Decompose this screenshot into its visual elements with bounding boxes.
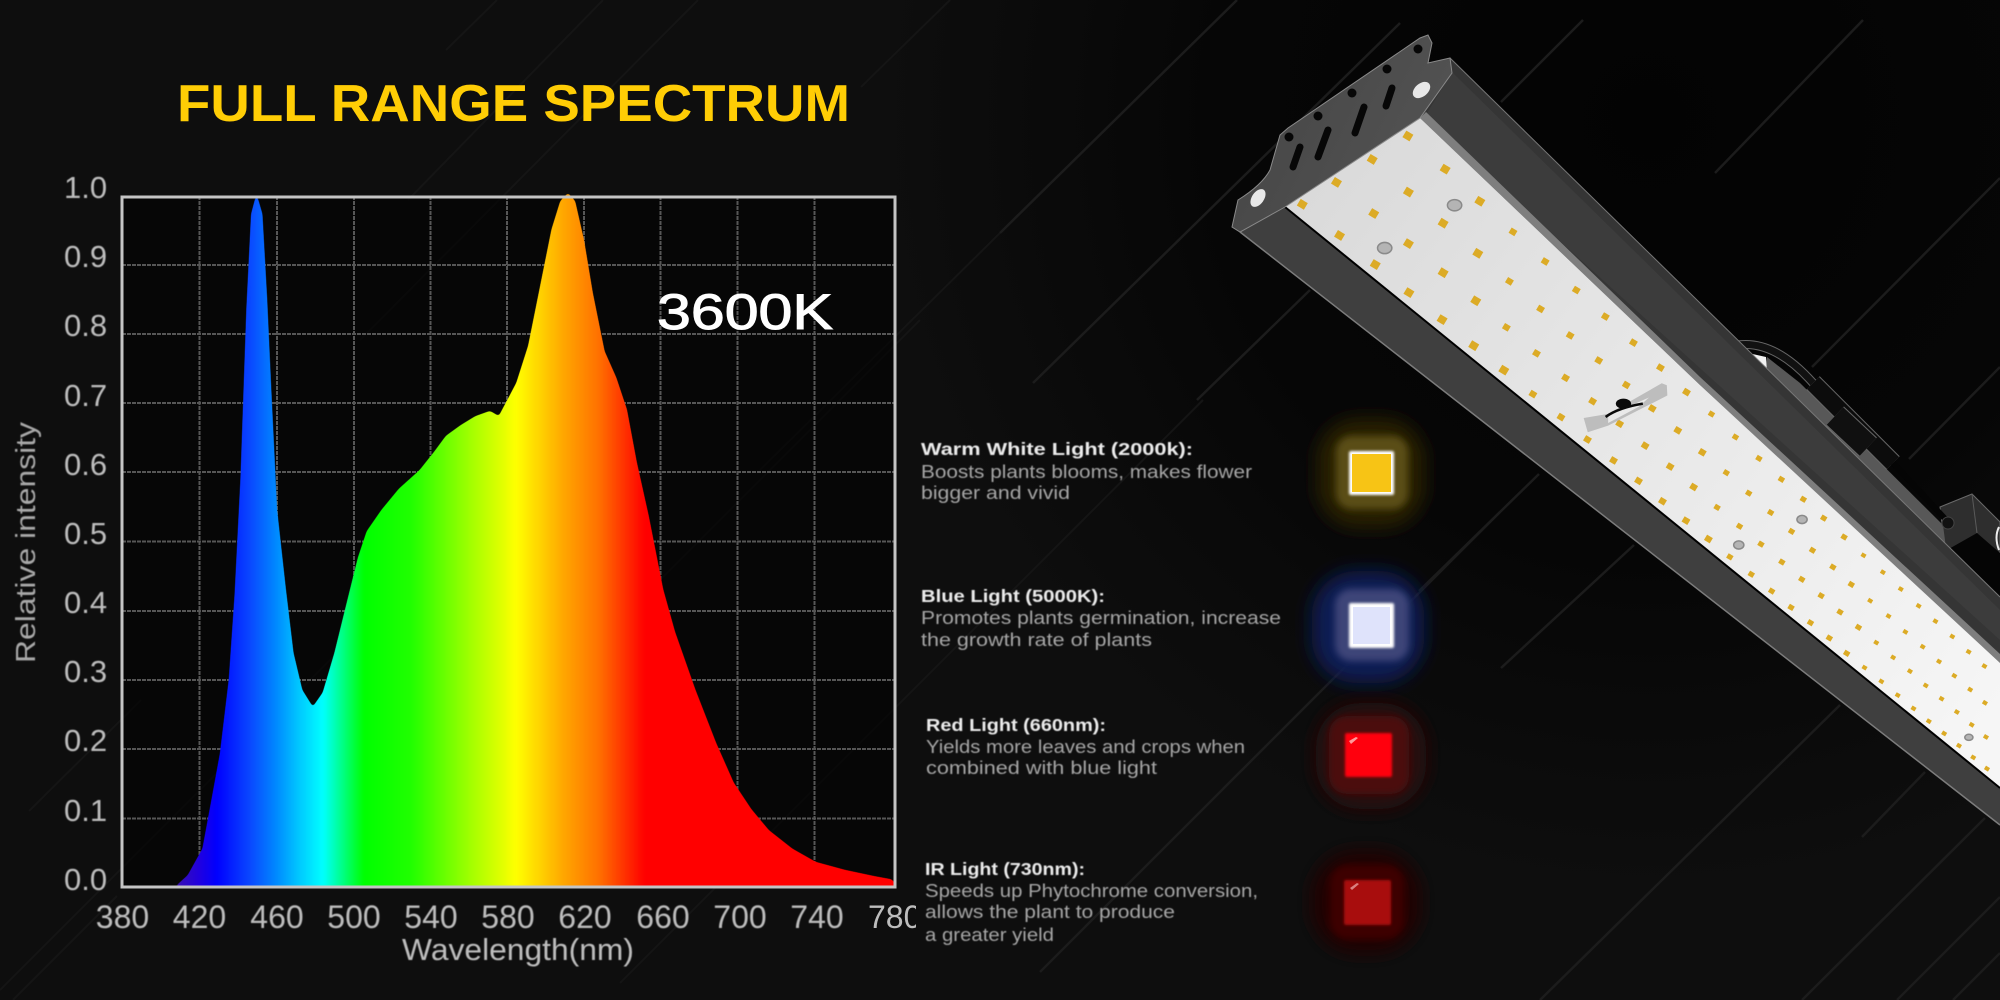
legend: warm white light: Boosts plants blooms, makes flower [921,462,1252,482]
y axis ticks: 1.0 [64,170,107,205]
y axis title: Relative intensity [10,422,41,663]
centre clip [1584,383,1667,432]
spectrum curve [122,193,897,887]
legend: warm white light: Warm White Light (2000k): [921,439,1193,459]
y axis ticks: 0.9 [64,239,107,274]
x axis ticks: 660 [636,899,690,935]
LED chips, screws and centre clip on board [1302,136,1987,769]
x axis ticks: 380 [96,899,149,935]
LED board [1285,118,2000,788]
x tick 780 clipped: 780 [868,899,921,935]
colour temperature label: 3600K [657,284,833,340]
x axis ticks: 580 [481,899,535,935]
product: LED grow light fixture [1232,35,2000,825]
plot background [122,196,895,887]
y axis ticks: 0.1 [64,793,107,828]
lower housing frame [1240,207,2000,825]
x axis ticks: 540 [404,899,458,935]
power cable and connector [1738,344,1954,529]
x axis ticks: 420 [173,899,226,935]
legend: IR light: a greater yield [925,925,1054,945]
legend: blue light [921,586,1281,650]
x axis ticks [96,899,844,935]
y axis ticks: 0.8 [64,308,107,343]
legend: red light: combined with blue light [926,758,1157,778]
y axis ticks: 0.4 [64,585,107,620]
driver strip behind body [1765,357,1946,548]
upper housing frame [1420,58,2000,668]
legend: red light: Yields more leaves and crops when [926,737,1245,757]
legend: blue light: the growth rate of plants [921,630,1152,650]
icon: IR LED [1312,851,1420,953]
bracket mounting holes [1247,79,1433,210]
title: FULL RANGE SPECTRUM [177,75,850,133]
x axis ticks: 460 [250,899,304,935]
x axis ticks: 740 [790,899,844,935]
y axis ticks: 0.3 [64,654,107,689]
y axis ticks: 0.5 [64,516,107,551]
driver box [1940,494,2000,600]
y axis ticks: 0.0 [64,862,107,897]
y axis ticks [64,170,107,897]
y axis ticks: 0.2 [64,723,107,758]
icon: blue LED [1312,571,1424,683]
legend: IR light: IR Light (730nm): [925,859,1085,879]
x axis ticks: 500 [327,899,381,935]
icon: red LED [1316,703,1426,809]
board screws [1378,200,1973,740]
legend: warm white light: bigger and vivid [921,483,1070,503]
legend: blue light: Promotes plants germination, increase [921,608,1281,628]
LED chips [1302,136,1987,769]
legend: IR light: Speeds up Phytochrome conversion, [925,881,1258,901]
mounting bracket [1232,35,1452,232]
y axis ticks: 0.7 [64,378,107,413]
x axis ticks: 700 [713,899,767,935]
x axis title: Wavelength(nm) [402,932,634,967]
icon: warm white LED [1318,419,1424,527]
legend: red light: Red Light (660nm): [926,715,1106,735]
y axis ticks: 0.6 [64,447,107,482]
x axis ticks: 620 [558,899,612,935]
legend: red light [926,715,1245,778]
chart: relative intensity vs wavelength [10,170,921,967]
plot frame [122,197,895,887]
legend: warm white light [921,439,1252,503]
legend: IR light [925,859,1258,945]
legend: IR light: allows the plant to produce [925,902,1175,922]
legend: blue light: Blue Light (5000K): [921,586,1105,606]
